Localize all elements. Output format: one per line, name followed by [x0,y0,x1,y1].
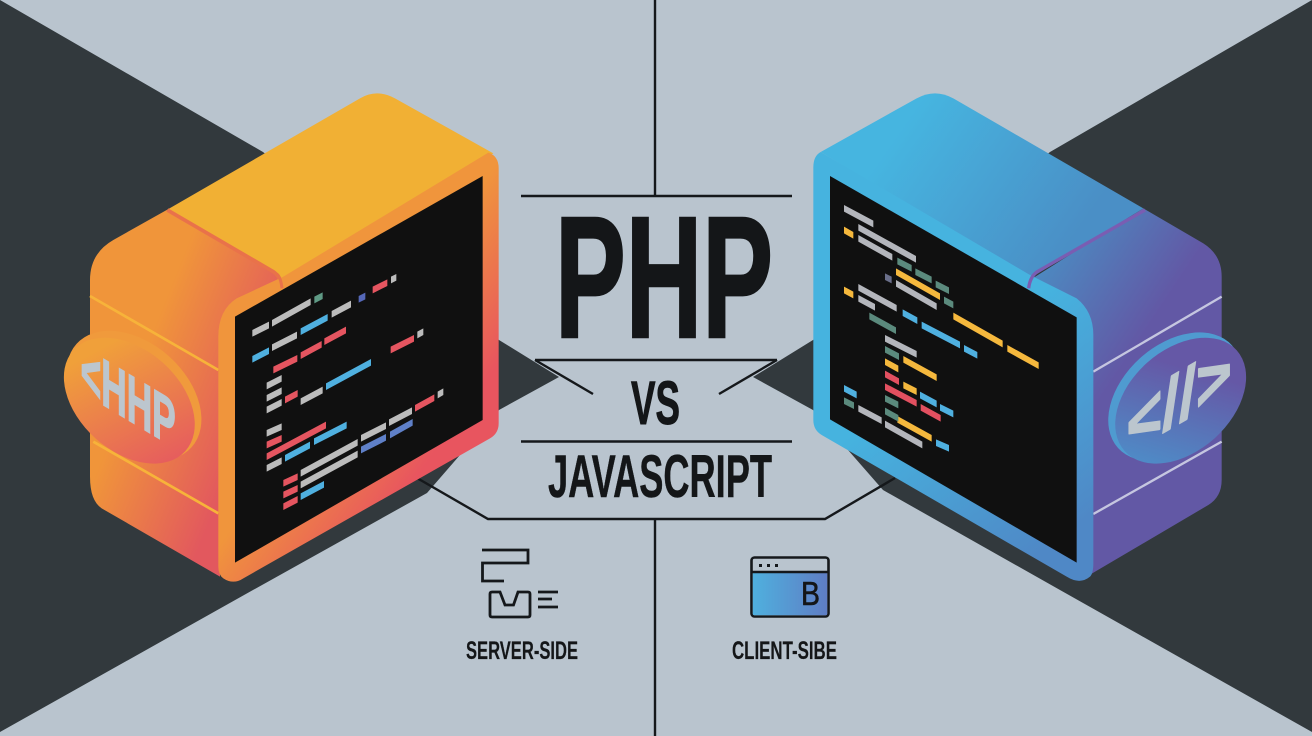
front frame [218,153,499,582]
title: VS: VS [631,369,680,437]
title: PHP: PHP [555,180,773,374]
top face [821,93,1143,278]
dark background wedge right [753,0,1312,732]
top face [167,93,493,280]
screen [830,176,1077,563]
top seam [1029,210,1145,288]
PHP isometric code box [39,93,499,582]
code lines [844,205,1039,452]
dark background wedge left [0,0,559,732]
side face [90,210,283,577]
badge label: <//> [1127,330,1232,468]
badge [39,305,227,489]
badge [1083,307,1271,489]
label: server-side: SERVER-SIDE [466,637,578,665]
badge label: <HHP [81,331,176,463]
JavaScript isometric code box [813,93,1271,581]
screen [235,176,483,563]
top seam [167,210,282,288]
icon: server-side [482,550,558,617]
side band lines [1093,297,1222,514]
icon letter: B [801,575,820,612]
side face [1030,208,1222,577]
code lines [252,274,443,510]
side band lines [90,296,218,513]
seam corner on frame [277,274,282,288]
front frame [813,152,1093,581]
label: client-side: CLIENT-SIBE [732,637,837,665]
centre connector lines [417,0,895,736]
title: JavaScript: JAVASCRIPT [548,443,772,510]
icon: client-side browser window [752,558,828,616]
